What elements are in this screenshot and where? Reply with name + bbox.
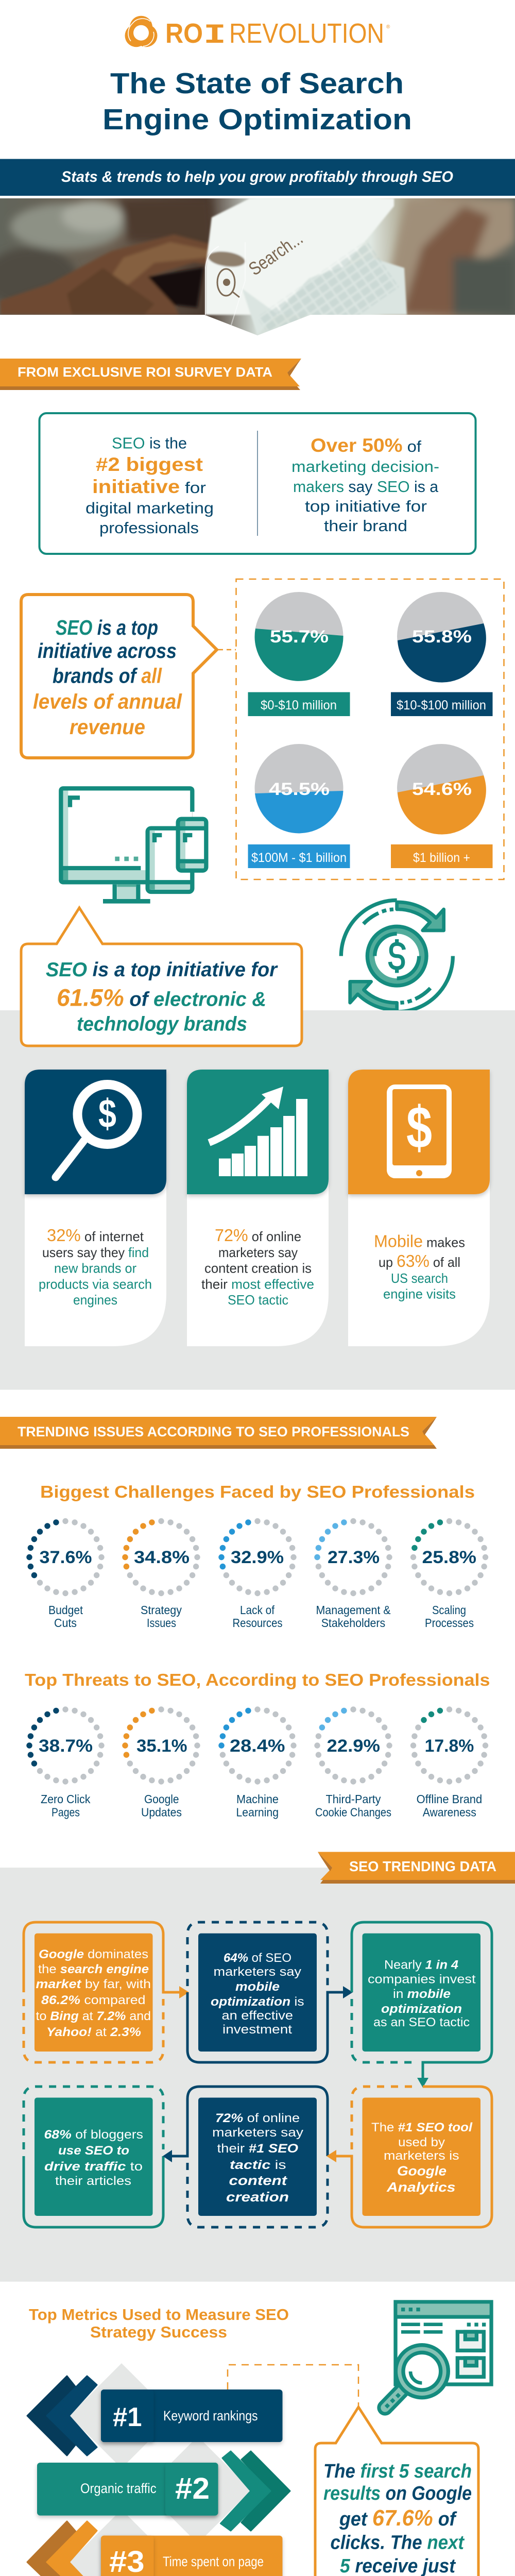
- card: mobile optimization investment: investment: [222, 2023, 292, 2037]
- card: #1 SEO tool google analytics: marketers is: [384, 2149, 459, 2163]
- text: over 50% of marketing decision-makers: makers say SEO is a: [293, 478, 439, 496]
- card: google dominates: the search engine: [38, 1962, 149, 1976]
- card: #1 SEO tool google analytics: Google: [397, 2163, 447, 2178]
- icon: browser window with magnifier: [385, 2302, 491, 2409]
- panel: 32% of internet users card: engines: [73, 1292, 117, 1308]
- card: 72% of online marketers: 72% of online: [215, 2111, 300, 2125]
- dial: strategy issues 34.8%: 34.8%: [134, 1548, 190, 1567]
- section ribbon: trending issues: TRENDING ISSUES ACCORDING TO SEO PROFESSIONALS: [18, 1424, 409, 1439]
- metric: #2 organic traffic: #2: [175, 2472, 210, 2505]
- card: mobile optimization investment: an effective: [221, 2009, 293, 2023]
- card: google dominates: Google dominates: [39, 1947, 148, 1961]
- dial: lack of resources 32.9%: Lack of: [240, 1603, 275, 1617]
- heading: top threats: Top Threats to SEO, According to SEO Professionals: [25, 1670, 490, 1689]
- pie: $10-$100 million 55.8%: [397, 592, 486, 683]
- card: nearly 1 in 4 companies: as an SEO tactic: [373, 2015, 470, 2029]
- card: nearly 1 in 4 companies: optimization: [381, 2002, 462, 2016]
- dial: google updates 35.1%: 35.1%: [136, 1736, 187, 1756]
- callout: first 5 search results: The first 5 search: [323, 2461, 472, 2482]
- panel: 32% of internet users card: users say they find: [42, 1245, 149, 1260]
- text: SEO is the #2 biggest initiative: [85, 434, 214, 537]
- pie: $1 billion + 54.6%: [397, 744, 486, 835]
- callout: first 5 search results: results on Google: [323, 2483, 472, 2504]
- metric: #2 organic traffic: Organic traffic: [80, 2481, 157, 2496]
- text: over 50% of marketing decision-makers: their brand: [324, 517, 407, 535]
- section ribbon: trending issues: [0, 1417, 437, 1449]
- callout: all levels of annual revenue: SEO is a top: [56, 616, 158, 639]
- label: $1 billion +: [391, 844, 492, 868]
- label: $0-$10 million: [248, 692, 350, 716]
- panel: 72% of online marketers card: content creation is: [204, 1260, 312, 1276]
- dial: scaling processes 25.8%: [410, 1518, 488, 1630]
- dial: strategy issues 34.8%: [122, 1518, 200, 1630]
- text: SEO is the #2 biggest initiative: #2 biggest: [96, 454, 203, 475]
- card: 68% of bloggers: 68% of bloggers: [44, 2128, 143, 2142]
- card: google dominates: to Bing at 7.2% and: [36, 2009, 151, 2023]
- callout: all levels of annual revenue: initiative across: [38, 639, 177, 663]
- heading: top metrics: [29, 2306, 289, 2341]
- metric: #1 keyword rankings: [27, 2376, 282, 2455]
- card: 72% of online marketers: marketers say: [212, 2126, 303, 2140]
- dial: google updates 35.1%: Google: [144, 1792, 179, 1806]
- card: 68% of bloggers: their articles: [55, 2174, 131, 2188]
- metric: #3 time spent on page: [27, 2521, 282, 2576]
- panel: 72% of online marketers card: [187, 1070, 329, 1346]
- dial: lack of resources 32.9%: [218, 1518, 297, 1630]
- dial: scaling processes 25.8%: Scaling: [432, 1603, 466, 1617]
- card: google dominates: [24, 1922, 189, 2062]
- dial: offline brand awareness 17.8%: Awareness: [423, 1806, 476, 1819]
- text: SEO is the #2 biggest initiative: digital marketing: [85, 499, 214, 517]
- dial: offline brand awareness 17.8%: 17.8%: [425, 1736, 474, 1756]
- card: #1 SEO tool google analytics: The #1 SEO tool: [371, 2121, 473, 2134]
- panel: 32% of internet users card: products via search: [39, 1277, 152, 1292]
- text: SEO is the #2 biggest initiative: SEO is the: [112, 434, 187, 452]
- metric: #1 keyword rankings: #1: [113, 2402, 142, 2432]
- dial: third-party cookie changes 22.9%: Third-Party: [325, 1792, 381, 1806]
- callout: electronic and technology brands: technology brands: [77, 1013, 247, 1036]
- callout: electronic and technology brands: SEO is a top initiative for: [46, 959, 278, 981]
- icon: money cycle arrows: [341, 900, 453, 1012]
- dial: scaling processes 25.8%: Processes: [425, 1616, 474, 1630]
- chart: top metrics ranked bars: [27, 2363, 290, 2576]
- dial: scaling processes 25.8%: 25.8%: [422, 1548, 476, 1567]
- dial: budget cuts 37.6%: Cuts: [54, 1616, 77, 1630]
- callout: all levels of annual revenue: revenue: [70, 715, 145, 739]
- dial: third-party cookie changes 22.9%: Cookie Changes: [315, 1806, 391, 1819]
- pie: $0-$10 million 55.7%: 55.7%: [270, 627, 329, 647]
- heading: biggest challenges: Biggest Challenges Faced by SEO Professionals: [40, 1482, 475, 1501]
- panel: 32% of internet users card: new brands or: [54, 1260, 136, 1276]
- panel: 72% of online marketers card: marketers say: [218, 1245, 298, 1260]
- callout: electronic and technology brands: [21, 908, 302, 1046]
- text: over 50% of marketing decision-makers: Over 50% of: [311, 435, 421, 456]
- panel: mobile 63% card: engine visits: [383, 1286, 456, 1301]
- dial: machine learning 28.4%: 28.4%: [230, 1736, 285, 1756]
- card: #1 SEO tool google analytics: [327, 2087, 492, 2227]
- icon: magnifier with dollar: $: [98, 1091, 116, 1136]
- panel: 72% of online marketers card: SEO tactic: [228, 1292, 288, 1308]
- metric: #2 organic traffic: [37, 2451, 290, 2531]
- card: 72% of online marketers: their #1 SEO: [217, 2142, 298, 2156]
- callout: all levels of annual revenue: levels of annual: [33, 690, 183, 714]
- pie: $10-$100 million 55.8%: 55.8%: [412, 627, 472, 647]
- dial: zero click pages 38.7%: 38.7%: [39, 1736, 93, 1756]
- card: mobile optimization investment: marketers say: [213, 1965, 301, 1979]
- dial: google updates 35.1%: [122, 1706, 200, 1819]
- subtitle banner: [0, 159, 515, 196]
- panel: mobile 63% card: Mobile makes: [374, 1231, 465, 1251]
- title: Engine Optimization: [102, 103, 412, 136]
- card: google dominates: market by far, with: [36, 1977, 151, 1991]
- dial: lack of resources 32.9%: Resources: [233, 1616, 282, 1630]
- dial: offline brand awareness 17.8%: Offline Brand: [417, 1792, 482, 1806]
- dial: management and stakeholders 27.3%: 27.3%: [328, 1548, 380, 1567]
- panel: revenue tier pie charts: [218, 579, 504, 879]
- dial: machine learning 28.4%: Learning: [236, 1806, 279, 1819]
- icon: phone with dollar: $: [406, 1095, 432, 1161]
- logo: ROI Revolution header: [125, 16, 390, 52]
- logo: ROI Revolution header: RO: [165, 18, 203, 49]
- heading: top metrics: Strategy Success: [90, 2323, 227, 2341]
- dial: offline brand awareness 17.8%: [410, 1706, 488, 1819]
- card: mobile optimization investment: mobile: [235, 1980, 280, 1994]
- dial: strategy issues 34.8%: Issues: [147, 1616, 176, 1630]
- background band: SEO trending data: [0, 1868, 515, 2282]
- label: $100M - $1 billion: $100M - $1 billion: [251, 851, 347, 865]
- metric: #1 keyword rankings: Keyword rankings: [163, 2408, 258, 2424]
- card: 72% of online marketers: tactic is: [230, 2158, 286, 2172]
- text: SEO is the #2 biggest initiative: professionals: [99, 519, 199, 537]
- label: $0-$10 million: $0-$10 million: [261, 698, 337, 713]
- dial: google updates 35.1%: Updates: [141, 1806, 182, 1819]
- title: [102, 67, 412, 136]
- hero photo: finger touching a search bar above a laptop keyboard: Search...: [245, 227, 306, 280]
- subtitle banner: Stats & trends to help you grow profitably through SEO: [61, 168, 453, 185]
- icon: magnifier with dollar: [25, 1070, 166, 1194]
- callout: all levels of annual revenue: brands of all: [53, 664, 162, 688]
- hero photo: finger touching a search bar above a laptop keyboard: [0, 198, 515, 335]
- card: 68% of bloggers: use SEO to: [58, 2144, 129, 2158]
- card: nearly 1 in 4 companies: Nearly 1 in 4: [384, 1958, 458, 1972]
- label: $100M - $1 billion: [248, 844, 350, 868]
- card: #1 SEO tool google analytics: used by: [398, 2136, 445, 2149]
- dial: zero click pages 38.7%: [26, 1706, 105, 1819]
- pie: $1 billion + 54.6%: 54.6%: [412, 779, 472, 799]
- callout: first 5 search results: get 67.6% of: [339, 2505, 457, 2531]
- dial: management and stakeholders 27.3%: Management &: [316, 1603, 390, 1617]
- icon: orange swirl emblem: [125, 16, 158, 47]
- panel: 32% of internet users card: 32% of internet: [47, 1226, 144, 1245]
- icon: desktop, tablet and phone devices: [61, 788, 206, 904]
- callout: first 5 search results: [228, 2365, 478, 2576]
- dial: zero click pages 38.7%: Zero Click: [41, 1792, 91, 1806]
- logo: ROI Revolution header: ®: [386, 24, 390, 30]
- dial: zero click pages 38.7%: Pages: [52, 1806, 80, 1819]
- title: The State of Search: [110, 67, 404, 100]
- heading: top metrics: Top Metrics Used to Measure SEO: [29, 2306, 289, 2324]
- card: 72% of online marketers: [163, 2087, 328, 2227]
- card: mobile optimization investment: [187, 1922, 353, 2062]
- panel: 32% of internet users card: [25, 1070, 166, 1346]
- panel: 72% of online marketers card: their most effective: [201, 1277, 314, 1292]
- label: $1 billion +: $1 billion +: [413, 851, 470, 865]
- dial: management and stakeholders 27.3%: Stakeholders: [321, 1616, 385, 1630]
- pie: $0-$10 million 55.7%: [254, 592, 344, 681]
- card: nearly 1 in 4 companies: [352, 1922, 492, 2088]
- text: SEO is the #2 biggest initiative: initiative for: [92, 476, 206, 497]
- card: mobile optimization investment: optimization is: [211, 1995, 304, 2009]
- dial: budget cuts 37.6%: Budget: [48, 1603, 83, 1617]
- logo: ROI Revolution header: I: [203, 20, 226, 52]
- logo: ROI Revolution header: REVOLUTION: [229, 18, 384, 49]
- card: mobile optimization investment: 64% of SEO: [224, 1951, 291, 1965]
- card: google dominates: Yahoo! at 2.3%: [46, 2025, 141, 2039]
- chart: biggest challenges dot rings: [26, 1518, 488, 1630]
- metric: #3 time spent on page: Time spent on page: [163, 2554, 264, 2569]
- card: nearly 1 in 4 companies: in mobile: [393, 1987, 451, 2001]
- card: google dominates: 86.2% compared: [41, 1993, 145, 2007]
- card: 68% of bloggers: drive traffic to: [44, 2160, 143, 2174]
- dial: budget cuts 37.6%: 37.6%: [39, 1548, 92, 1567]
- label: $10-$100 million: $10-$100 million: [397, 698, 486, 713]
- panel: mobile 63% card: [348, 1070, 490, 1346]
- panel: 72% of online marketers card: 72% of online: [215, 1226, 301, 1245]
- card: 72% of online marketers: content: [229, 2173, 288, 2188]
- dial: strategy issues 34.8%: Strategy: [141, 1603, 182, 1617]
- label: $10-$100 million: [391, 692, 492, 716]
- card: 68% of bloggers: [24, 2087, 163, 2227]
- section ribbon: SEO trending data: [318, 1852, 515, 1884]
- card: 72% of online marketers: creation: [226, 2189, 289, 2205]
- icon: phone with dollar: [348, 1070, 490, 1194]
- card: nearly 1 in 4 companies: companies invest: [368, 1973, 476, 1987]
- background band: mid section: [0, 1010, 515, 1390]
- panel: mobile 63% card: US search: [391, 1270, 448, 1286]
- section ribbon: from exclusive ROI survey data: FROM EXCLUSIVE ROI SURVEY DATA: [18, 364, 272, 380]
- pie: $100M - $1 billion 45.5%: [254, 744, 343, 833]
- section ribbon: SEO trending data: SEO TRENDING DATA: [349, 1858, 496, 1874]
- text: over 50% of marketing decision-makers: marketing decision-: [291, 457, 439, 476]
- text: over 50% of marketing decision-makers: top initiative for: [305, 497, 427, 515]
- dial: third-party cookie changes 22.9%: 22.9%: [327, 1736, 380, 1756]
- dial: management and stakeholders 27.3%: [314, 1518, 392, 1630]
- dial: lack of resources 32.9%: 32.9%: [231, 1548, 284, 1567]
- dial: third-party cookie changes 22.9%: [314, 1706, 392, 1819]
- callout: all levels of annual revenue: [21, 595, 217, 758]
- section ribbon: from exclusive ROI survey data: [0, 359, 301, 390]
- text: over 50% of marketing decision-makers: [291, 435, 439, 535]
- callout: electronic and technology brands: 61.5% of electronic &: [57, 984, 266, 1011]
- dial: machine learning 28.4%: Machine: [236, 1792, 279, 1806]
- dial: budget cuts 37.6%: [26, 1518, 105, 1630]
- panel: flow of SEO trending stats: [24, 1922, 492, 2227]
- dial: machine learning 28.4%: [218, 1706, 297, 1819]
- pie: $100M - $1 billion 45.5%: 45.5%: [269, 779, 330, 799]
- chart: top threats dot rings: [26, 1706, 488, 1819]
- panel: SEO biggest initiative stats: [39, 413, 476, 554]
- panel: mobile 63% card: up 63% of all: [379, 1251, 460, 1270]
- card: #1 SEO tool google analytics: Analytics: [386, 2179, 455, 2195]
- icon: growth bar chart with arrow: [187, 1070, 329, 1194]
- callout: first 5 search results: clicks. The next: [331, 2532, 465, 2554]
